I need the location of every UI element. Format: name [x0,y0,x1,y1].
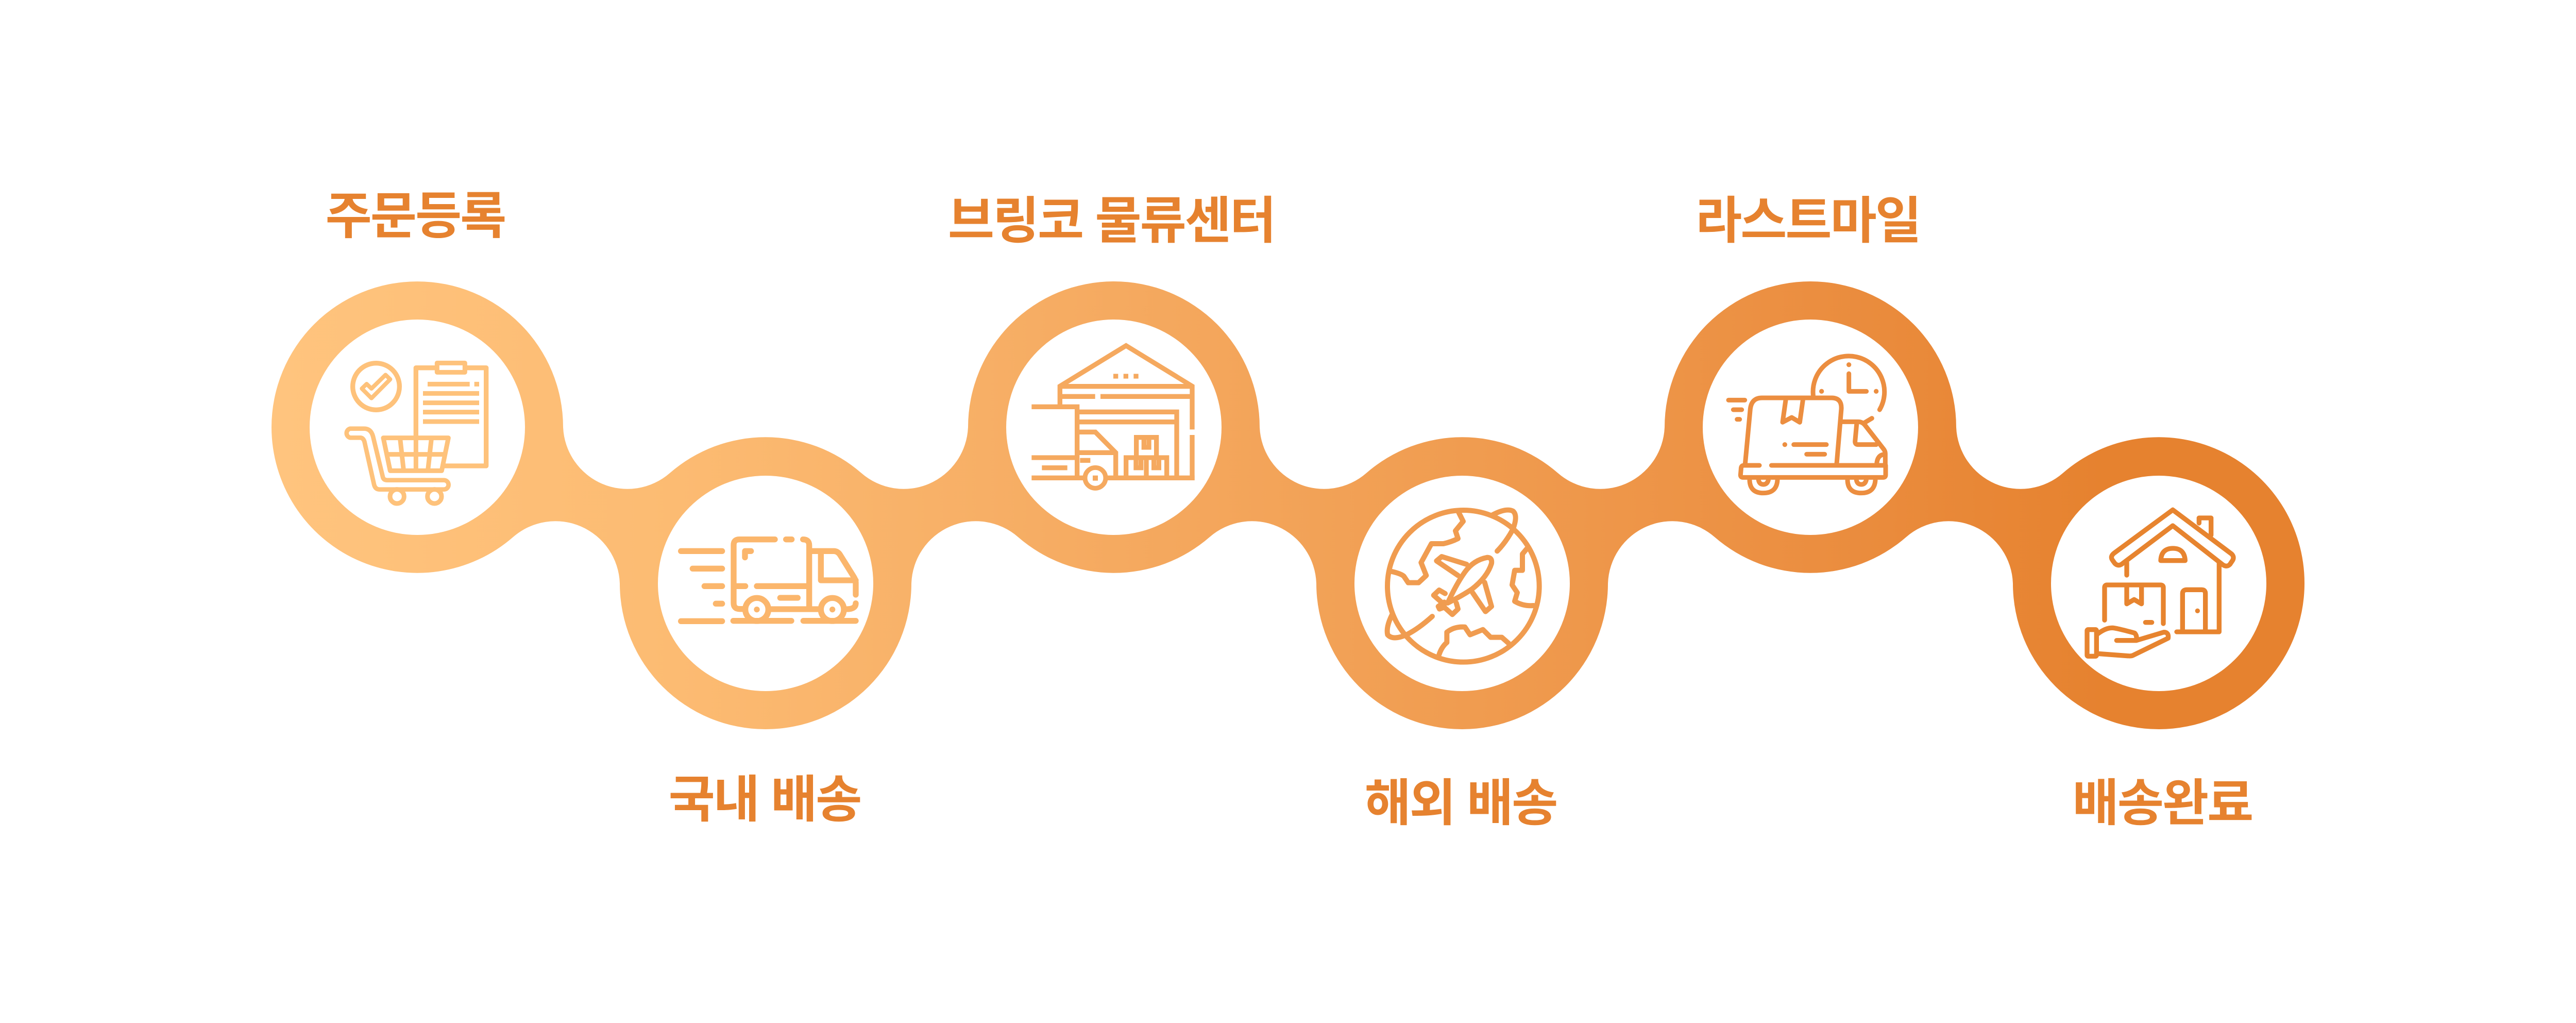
circle 3 interior [1006,320,1222,535]
icon: parcel truck with clock [1728,356,1886,493]
heading: order registration: 주문등록 [326,188,505,244]
circle 6 interior [2051,476,2266,691]
heading: logistics center: 브링코 물류센터 [948,192,1275,249]
heading: domestic shipping: 국내 배송 [669,771,860,828]
heading: overseas shipping: 해외 배송 [1365,775,1556,831]
circle 5 interior [1703,320,1918,535]
circle 1 interior [310,320,525,535]
icon: globe with airplane [1387,510,1539,662]
icon: delivery truck [681,540,856,621]
icon: shopping cart with order list [347,363,486,504]
circle 4 interior [1354,476,1570,691]
icon: warehouse with truck and boxes [1031,346,1195,488]
circle 2 interior [658,476,873,691]
heading: delivery complete: 배송완료 [2073,775,2252,831]
winding gradient ribbon [272,281,2304,729]
heading: last mile: 라스트마일 [1696,192,1920,249]
icon: house with parcel in hand [2087,510,2233,656]
